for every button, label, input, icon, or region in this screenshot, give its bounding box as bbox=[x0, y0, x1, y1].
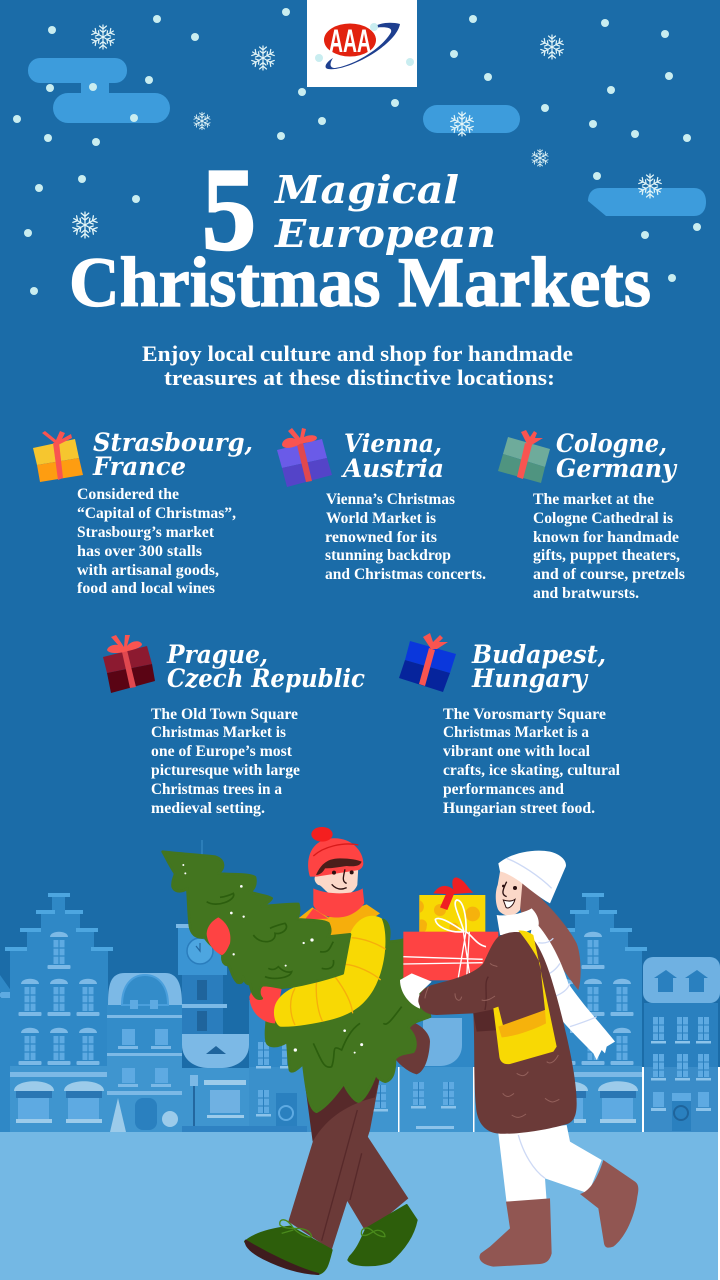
panel: Budapest bbox=[399, 633, 621, 817]
building: right gabled house bbox=[539, 893, 647, 1132]
tree lower bbox=[266, 920, 430, 1112]
text: Vienna: and Christmas concerts. bbox=[325, 566, 486, 583]
shoes bbox=[245, 1205, 417, 1274]
coat bbox=[418, 932, 577, 1134]
text: Strasbourg bbox=[77, 486, 236, 597]
text: Prague: one of Europe’s most bbox=[151, 743, 293, 760]
text: Strasbourg: Strasbourg’s market bbox=[77, 524, 215, 541]
text: Budapest bbox=[443, 706, 621, 817]
building: behind the shoppers bbox=[249, 1000, 574, 1132]
icon: purple gift bbox=[277, 428, 332, 487]
trousers bbox=[288, 1067, 408, 1250]
illustration: man carrying tree bbox=[163, 827, 430, 1274]
icon: maroon gift bbox=[103, 635, 155, 693]
text: Cologne bbox=[533, 491, 685, 602]
text: Budapest: Christmas Market is a bbox=[443, 724, 589, 741]
text: Prague: Christmas trees in a bbox=[151, 781, 282, 798]
heading: Strasbourg: Strasbourg, bbox=[93, 428, 253, 457]
text: Cologne: Cologne Cathedral is bbox=[533, 510, 673, 527]
panel: Cologne bbox=[498, 429, 685, 602]
building: left gabled house bbox=[5, 893, 113, 1132]
panel: Vienna bbox=[277, 428, 486, 583]
building: mansard house bbox=[107, 973, 183, 1132]
text: Vienna bbox=[325, 491, 486, 583]
head bbox=[308, 827, 363, 896]
lower red mitten bbox=[249, 983, 282, 1023]
heading: Cologne: Cologne, bbox=[556, 429, 667, 458]
title: Magical bbox=[273, 167, 459, 212]
text: Strasbourg: “Capital of Christmas”, bbox=[77, 505, 236, 522]
tree upper bbox=[163, 852, 363, 1054]
heading: Cologne: Germany bbox=[556, 454, 677, 483]
text: Prague: medieval setting. bbox=[151, 800, 265, 817]
icon: yellow gift bbox=[33, 431, 83, 482]
building: far left bbox=[0, 975, 18, 1132]
text: Budapest: crafts, ice skating, cultural bbox=[443, 762, 621, 779]
title: 5 bbox=[202, 144, 256, 275]
heading: Prague: Prague, bbox=[166, 640, 268, 669]
white mitten bbox=[400, 973, 432, 1009]
upper red mitten bbox=[207, 917, 230, 955]
panel: Prague bbox=[103, 635, 365, 817]
face bbox=[496, 871, 523, 916]
text: Vienna: renowned for its bbox=[325, 529, 437, 546]
subtitle bbox=[142, 341, 573, 390]
heading: Prague: Czech Republic bbox=[167, 664, 365, 693]
snowflakes bbox=[72, 25, 662, 238]
town skyline bbox=[0, 840, 720, 1132]
scarf bbox=[497, 908, 615, 1060]
text: Strasbourg: food and local wines bbox=[77, 580, 215, 597]
title: European bbox=[274, 211, 496, 256]
text: Prague: The Old Town Square bbox=[151, 706, 298, 723]
text: Strasbourg: Considered the bbox=[77, 486, 179, 503]
text: Cologne: gifts, puppet theaters, bbox=[533, 547, 680, 564]
building: right blue house bbox=[642, 957, 720, 1132]
heading: Vienna: Austria bbox=[341, 454, 444, 483]
text: Vienna: Vienna’s Christmas bbox=[326, 491, 455, 508]
hair bbox=[520, 882, 581, 990]
hat bbox=[498, 851, 566, 903]
heading: Strasbourg bbox=[92, 428, 253, 481]
heading: Cologne bbox=[556, 429, 677, 483]
text: Vienna: World Market is bbox=[326, 510, 436, 527]
text: Cologne: and of course, pretzels bbox=[533, 566, 685, 583]
clouds bbox=[28, 58, 706, 216]
text: Cologne: known for handmade bbox=[533, 529, 679, 546]
text: Cologne: and bratwursts. bbox=[533, 585, 639, 602]
brown mitt bbox=[392, 1022, 430, 1074]
heading: Vienna: Vienna, bbox=[344, 429, 442, 458]
text: Prague: picturesque with large bbox=[151, 762, 300, 779]
scarf bbox=[313, 888, 364, 917]
sleeve bbox=[274, 916, 386, 1027]
icon: blue gift bbox=[399, 633, 456, 692]
bag bbox=[493, 931, 557, 1064]
text: Budapest: vibrant one with local bbox=[443, 743, 591, 760]
collar bbox=[298, 904, 380, 937]
text: Prague bbox=[151, 706, 300, 817]
text: Budapest: performances and bbox=[443, 781, 564, 798]
text: Cologne: The market at the bbox=[533, 491, 654, 508]
title: Christmas Markets bbox=[69, 244, 651, 322]
text: Budapest: Hungarian street food. bbox=[443, 800, 595, 817]
text: Prague: Christmas Market is bbox=[151, 724, 286, 741]
snow dots bbox=[13, 8, 701, 295]
text: Vienna: stunning backdrop bbox=[325, 547, 451, 564]
logo: AAA: AAA bbox=[329, 23, 371, 59]
text: Budapest: The Vorosmarty Square bbox=[443, 706, 606, 723]
heading: Vienna bbox=[341, 429, 444, 483]
logo: AAA bbox=[307, 0, 417, 87]
heading: Budapest: Hungary bbox=[471, 664, 588, 693]
ground bbox=[0, 1132, 718, 1280]
building: clock tower bbox=[176, 840, 249, 1132]
panel: Strasbourg bbox=[33, 428, 253, 597]
heading: Prague bbox=[166, 640, 365, 693]
icon: teal gift bbox=[498, 430, 550, 483]
gift stack bbox=[403, 877, 498, 980]
title bbox=[69, 144, 651, 322]
subtitle: treasures at these distinctive locations: bbox=[164, 365, 555, 390]
text: Strasbourg: with artisanal goods, bbox=[77, 562, 219, 579]
legs bbox=[498, 1125, 602, 1203]
heading: Budapest bbox=[471, 640, 606, 693]
illustration: woman carrying gifts bbox=[400, 851, 638, 1267]
heading: Strasbourg: France bbox=[92, 452, 186, 481]
subtitle: Enjoy local culture and shop for handmade bbox=[142, 341, 573, 366]
boots bbox=[479, 1160, 638, 1267]
heading: Budapest: Budapest, bbox=[471, 640, 606, 669]
text: Strasbourg: has over 300 stalls bbox=[77, 543, 202, 560]
